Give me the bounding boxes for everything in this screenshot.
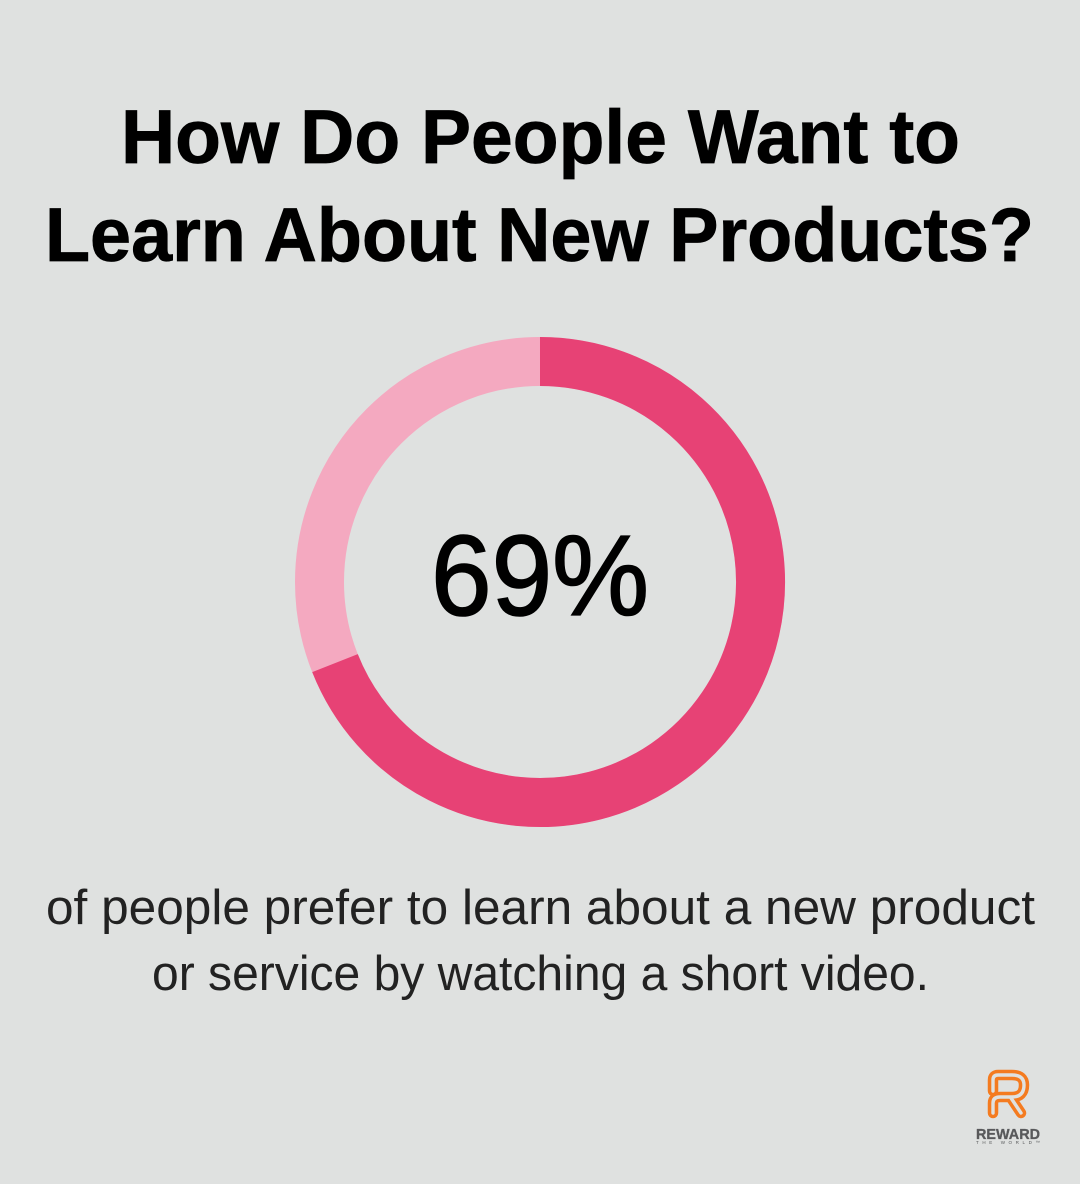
description text — [46, 881, 1035, 1001]
donut chart: 69% — [320, 362, 761, 802]
logo: Reward the World — [976, 1075, 1040, 1145]
title — [45, 95, 1034, 278]
icon: orange R mark — [993, 1075, 1024, 1113]
title: How Do People Want to — [121, 95, 960, 180]
description text: of people prefer to learn about a new product — [46, 881, 1035, 935]
description text: or service by watching a short video. — [152, 947, 929, 1001]
statistic: 69%: 69% — [431, 513, 649, 640]
title: Learn About New Products? — [45, 193, 1034, 278]
logo tagline: THE WORLD™ — [976, 1140, 1040, 1145]
logo wordmark: REWARD — [976, 1127, 1040, 1143]
